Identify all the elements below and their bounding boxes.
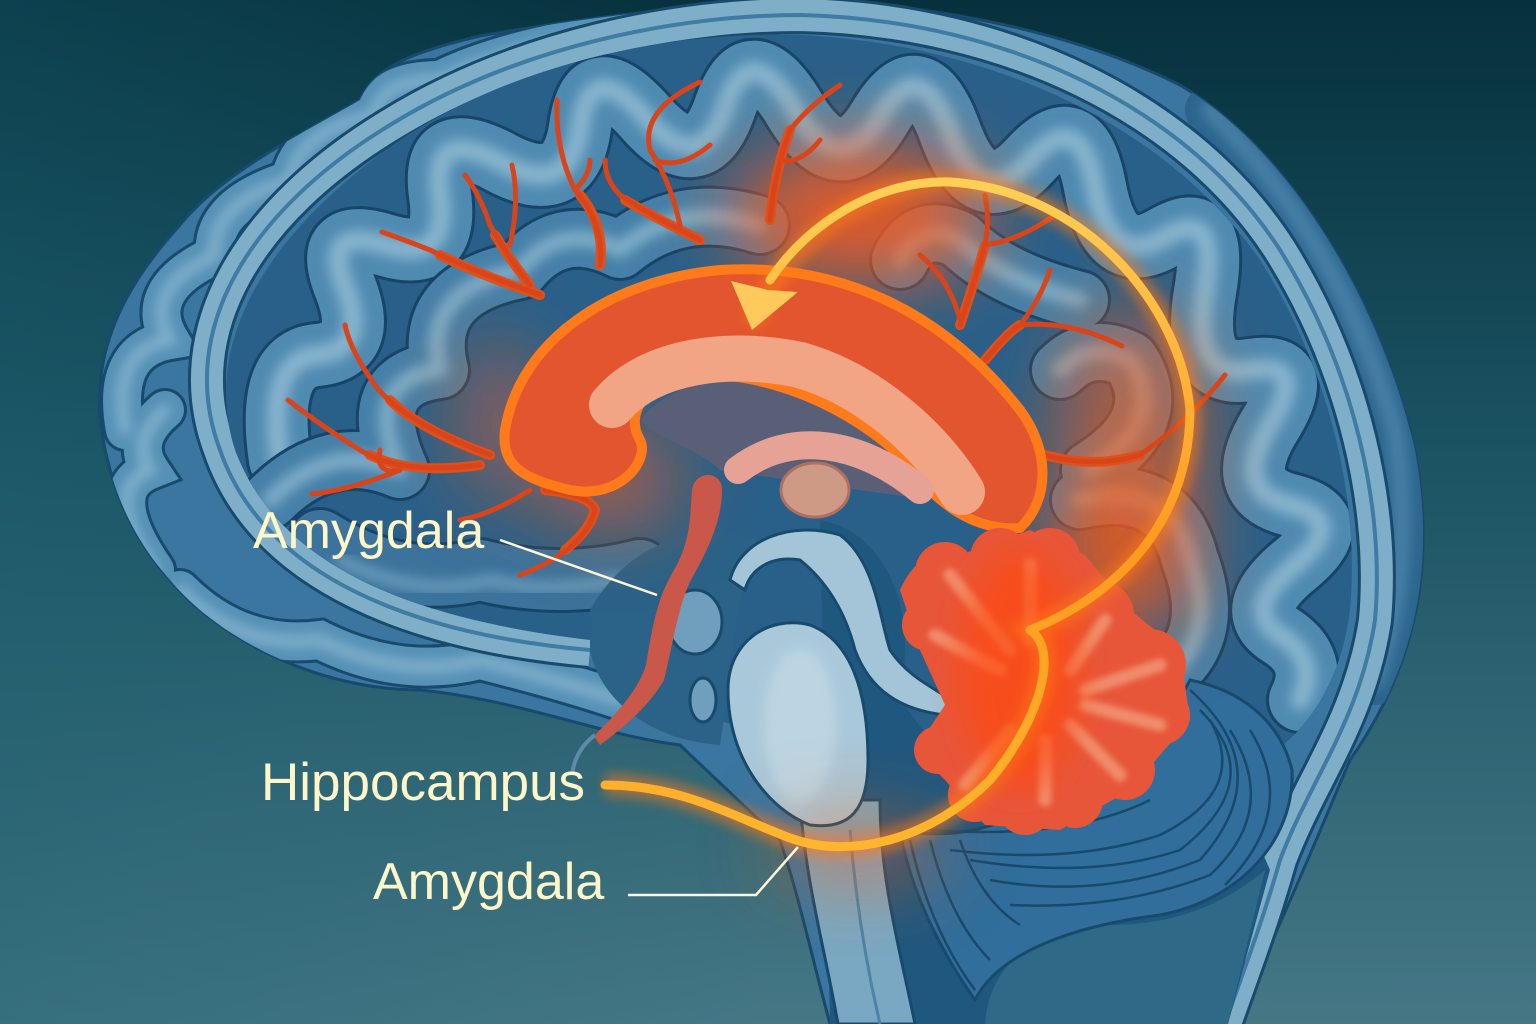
label: Amygdala lower: Amygdala xyxy=(373,853,604,911)
upper hook xyxy=(730,530,950,715)
pons oval xyxy=(728,623,868,826)
yellow circuit arrow xyxy=(605,182,1190,847)
inner cavity with cortex gyri xyxy=(226,34,1352,744)
inner gyri row xyxy=(270,217,1200,680)
label: Amygdala upper: Amygdala xyxy=(253,502,484,560)
arrowhead xyxy=(731,281,798,330)
central dark ventricle xyxy=(640,375,932,500)
orange cerebellum lobe xyxy=(900,528,1190,835)
skull band xyxy=(207,15,1377,1024)
temporal lobe xyxy=(320,540,640,580)
leader lines xyxy=(500,540,798,895)
fornix pale band xyxy=(612,358,962,492)
pink thalamic band xyxy=(738,445,920,490)
small blue nuclei xyxy=(668,590,722,722)
lower stem xyxy=(800,800,915,1024)
gyri chain xyxy=(270,72,1321,700)
label: Hippocampus: Hippocampus xyxy=(261,753,585,812)
corpus callosum xyxy=(504,269,1042,528)
red stalk xyxy=(594,475,722,745)
dark inner neck region xyxy=(820,520,1270,1024)
orange glow xyxy=(460,145,1205,880)
thalamus oval xyxy=(781,463,849,517)
lower neck opening xyxy=(985,870,1265,1024)
red branching fibres xyxy=(288,82,1225,575)
blue cerebellum xyxy=(900,680,1292,1000)
brainstem xyxy=(728,530,950,1024)
outer cortex folds xyxy=(122,25,1402,700)
stalk tail xyxy=(572,735,595,775)
temporal lower lobe near midbrain xyxy=(590,533,760,745)
